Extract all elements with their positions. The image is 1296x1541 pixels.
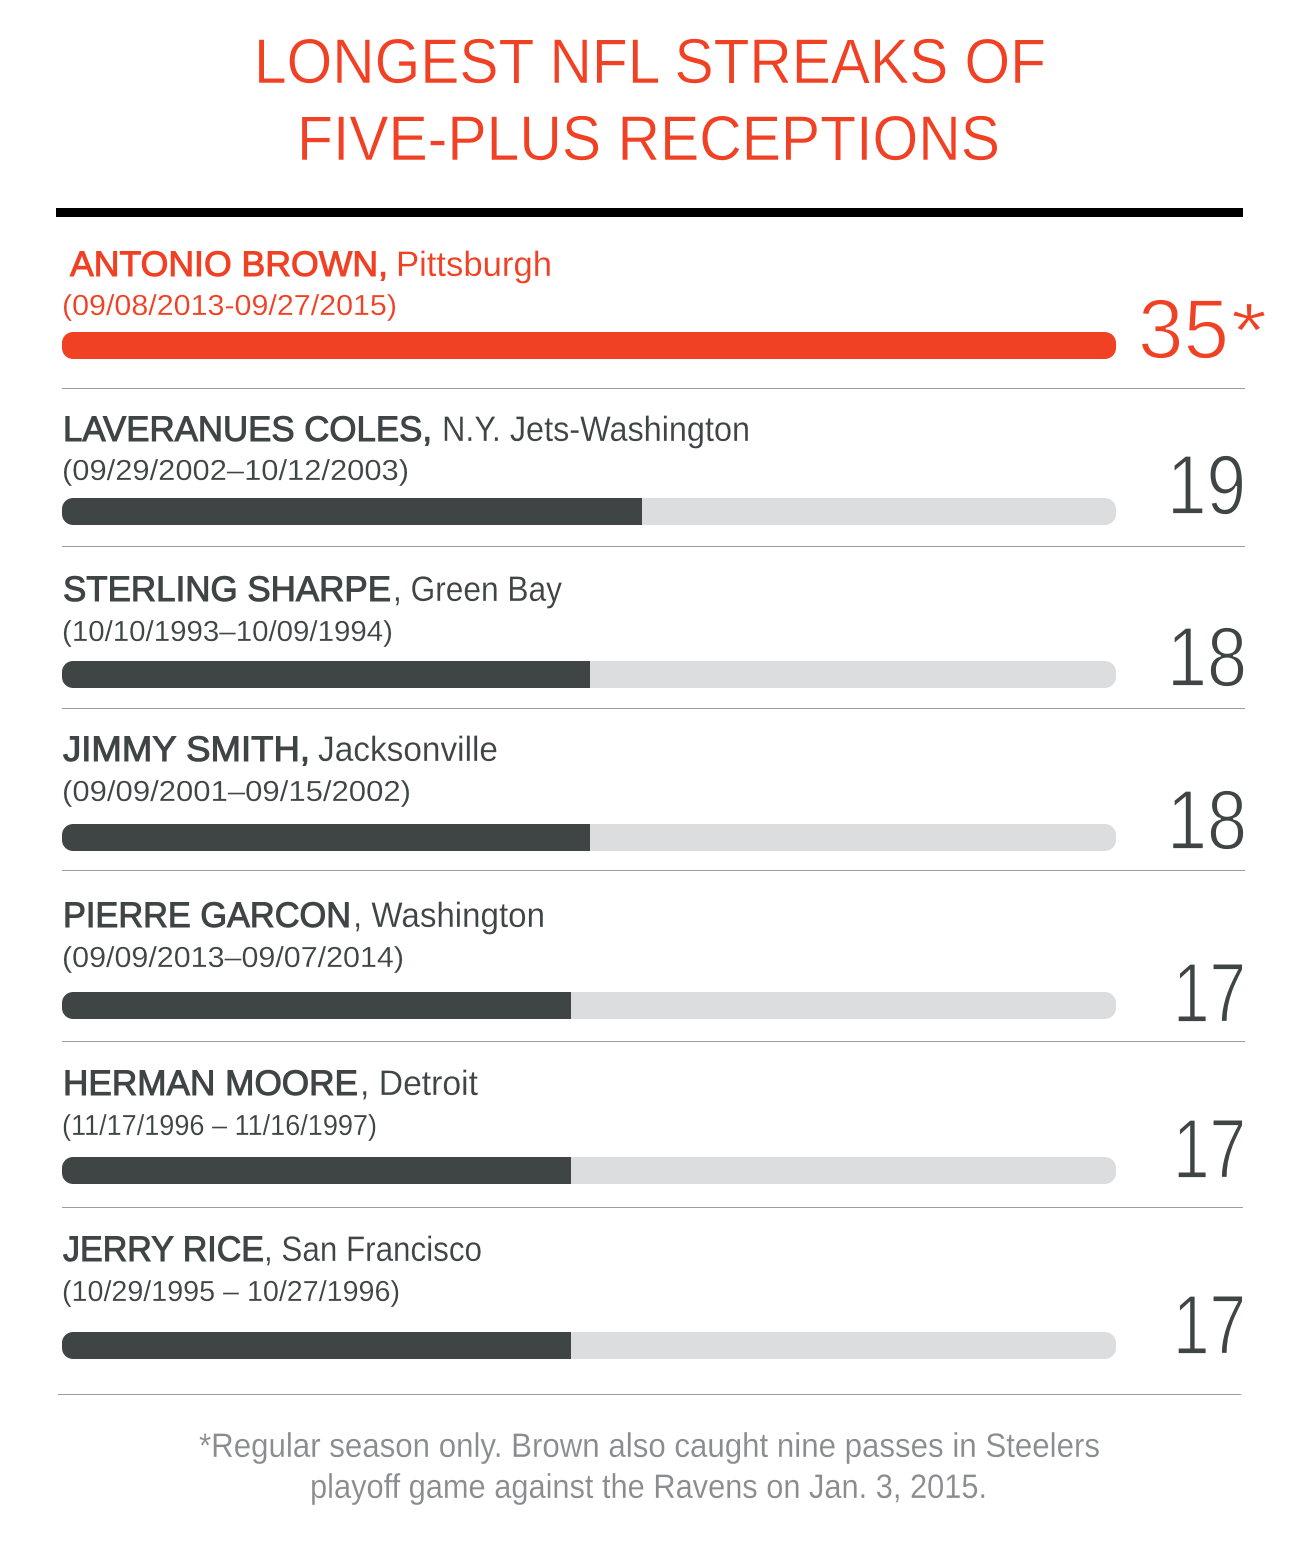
- name: Rice: JERRY RICE: [63, 1230, 264, 1269]
- row: Pierre Garcon: [62, 896, 1246, 1040]
- title: [254, 27, 1046, 174]
- row: Jerry Rice: [62, 1230, 1246, 1372]
- team: Detroit: , Detroit: [360, 1064, 478, 1103]
- row: Sterling Sharpe: [62, 570, 1247, 704]
- bar: Sharpe 18: [62, 661, 1116, 688]
- name: Smith: JIMMY SMITH,: [63, 730, 310, 769]
- dates: Brown: (09/08/2013-09/27/2015): [62, 290, 397, 322]
- name: Moore: HERMAN MOORE: [63, 1064, 358, 1103]
- row: Herman Moore: [62, 1064, 1246, 1196]
- bar: Rice 17: [62, 1332, 1116, 1359]
- team: Green Bay: , Green Bay: [393, 570, 562, 609]
- value: 17: 17: [1173, 1278, 1246, 1372]
- team: Jacksonville: Jacksonville: [318, 730, 498, 769]
- value: 35: 35: [1138, 282, 1229, 376]
- dates: Smith: (09/09/2001–09/15/2002): [62, 776, 411, 808]
- asterisk: *: [1231, 286, 1267, 374]
- dates: Rice: (10/29/1995 – 10/27/1996): [62, 1276, 400, 1308]
- bar: Garcon 17: [62, 992, 1116, 1019]
- row: Laveranues Coles: [62, 410, 1246, 532]
- dates: Garcon: (09/09/2013–09/07/2014): [62, 942, 404, 974]
- value: 18: 18: [1167, 610, 1247, 704]
- footnote: [199, 1427, 1100, 1506]
- value: 19: 19: [1167, 438, 1246, 532]
- name: Coles: LAVERANUES COLES,: [63, 410, 432, 449]
- row: Jimmy Smith: [62, 730, 1247, 867]
- footnote: *Regular season only. Brown also caught nine passes in Steelers: [199, 1427, 1100, 1465]
- team: San Francisco: , San Francisco: [264, 1230, 482, 1269]
- bar: Brown 35: [62, 332, 1116, 359]
- team: Jets-Washington: N.Y. Jets-Washington: [442, 410, 750, 449]
- name: Antonio Brown: ANTONIO BROWN,: [70, 245, 388, 284]
- name: Garcon: PIERRE GARCON: [63, 896, 351, 935]
- title: LONGEST NFL STREAKS OF: [254, 27, 1046, 97]
- dates: Moore: (11/17/1996 – 11/16/1997): [62, 1110, 377, 1142]
- title: FIVE-PLUS RECEPTIONS: [297, 104, 1000, 174]
- footnote: playoff game against the Ravens on Jan. 3, 2015.: [310, 1468, 987, 1506]
- bar: Smith 18: [62, 824, 1116, 851]
- value: 18: 18: [1167, 773, 1247, 867]
- value: 17: 17: [1173, 946, 1246, 1040]
- row: Antonio Brown: [62, 245, 1267, 376]
- value: 17: 17: [1173, 1102, 1246, 1196]
- dates: Sharpe: (10/10/1993–10/09/1994): [62, 616, 393, 648]
- team: Washington: , Washington: [353, 896, 545, 935]
- team: Pittsburgh: Pittsburgh: [396, 245, 552, 284]
- bar: Coles 19: [62, 498, 1116, 525]
- name: Sharpe: STERLING SHARPE: [63, 570, 391, 609]
- bar: Moore 17: [62, 1157, 1116, 1184]
- dates: Coles: (09/29/2002–10/12/2003): [62, 455, 409, 487]
